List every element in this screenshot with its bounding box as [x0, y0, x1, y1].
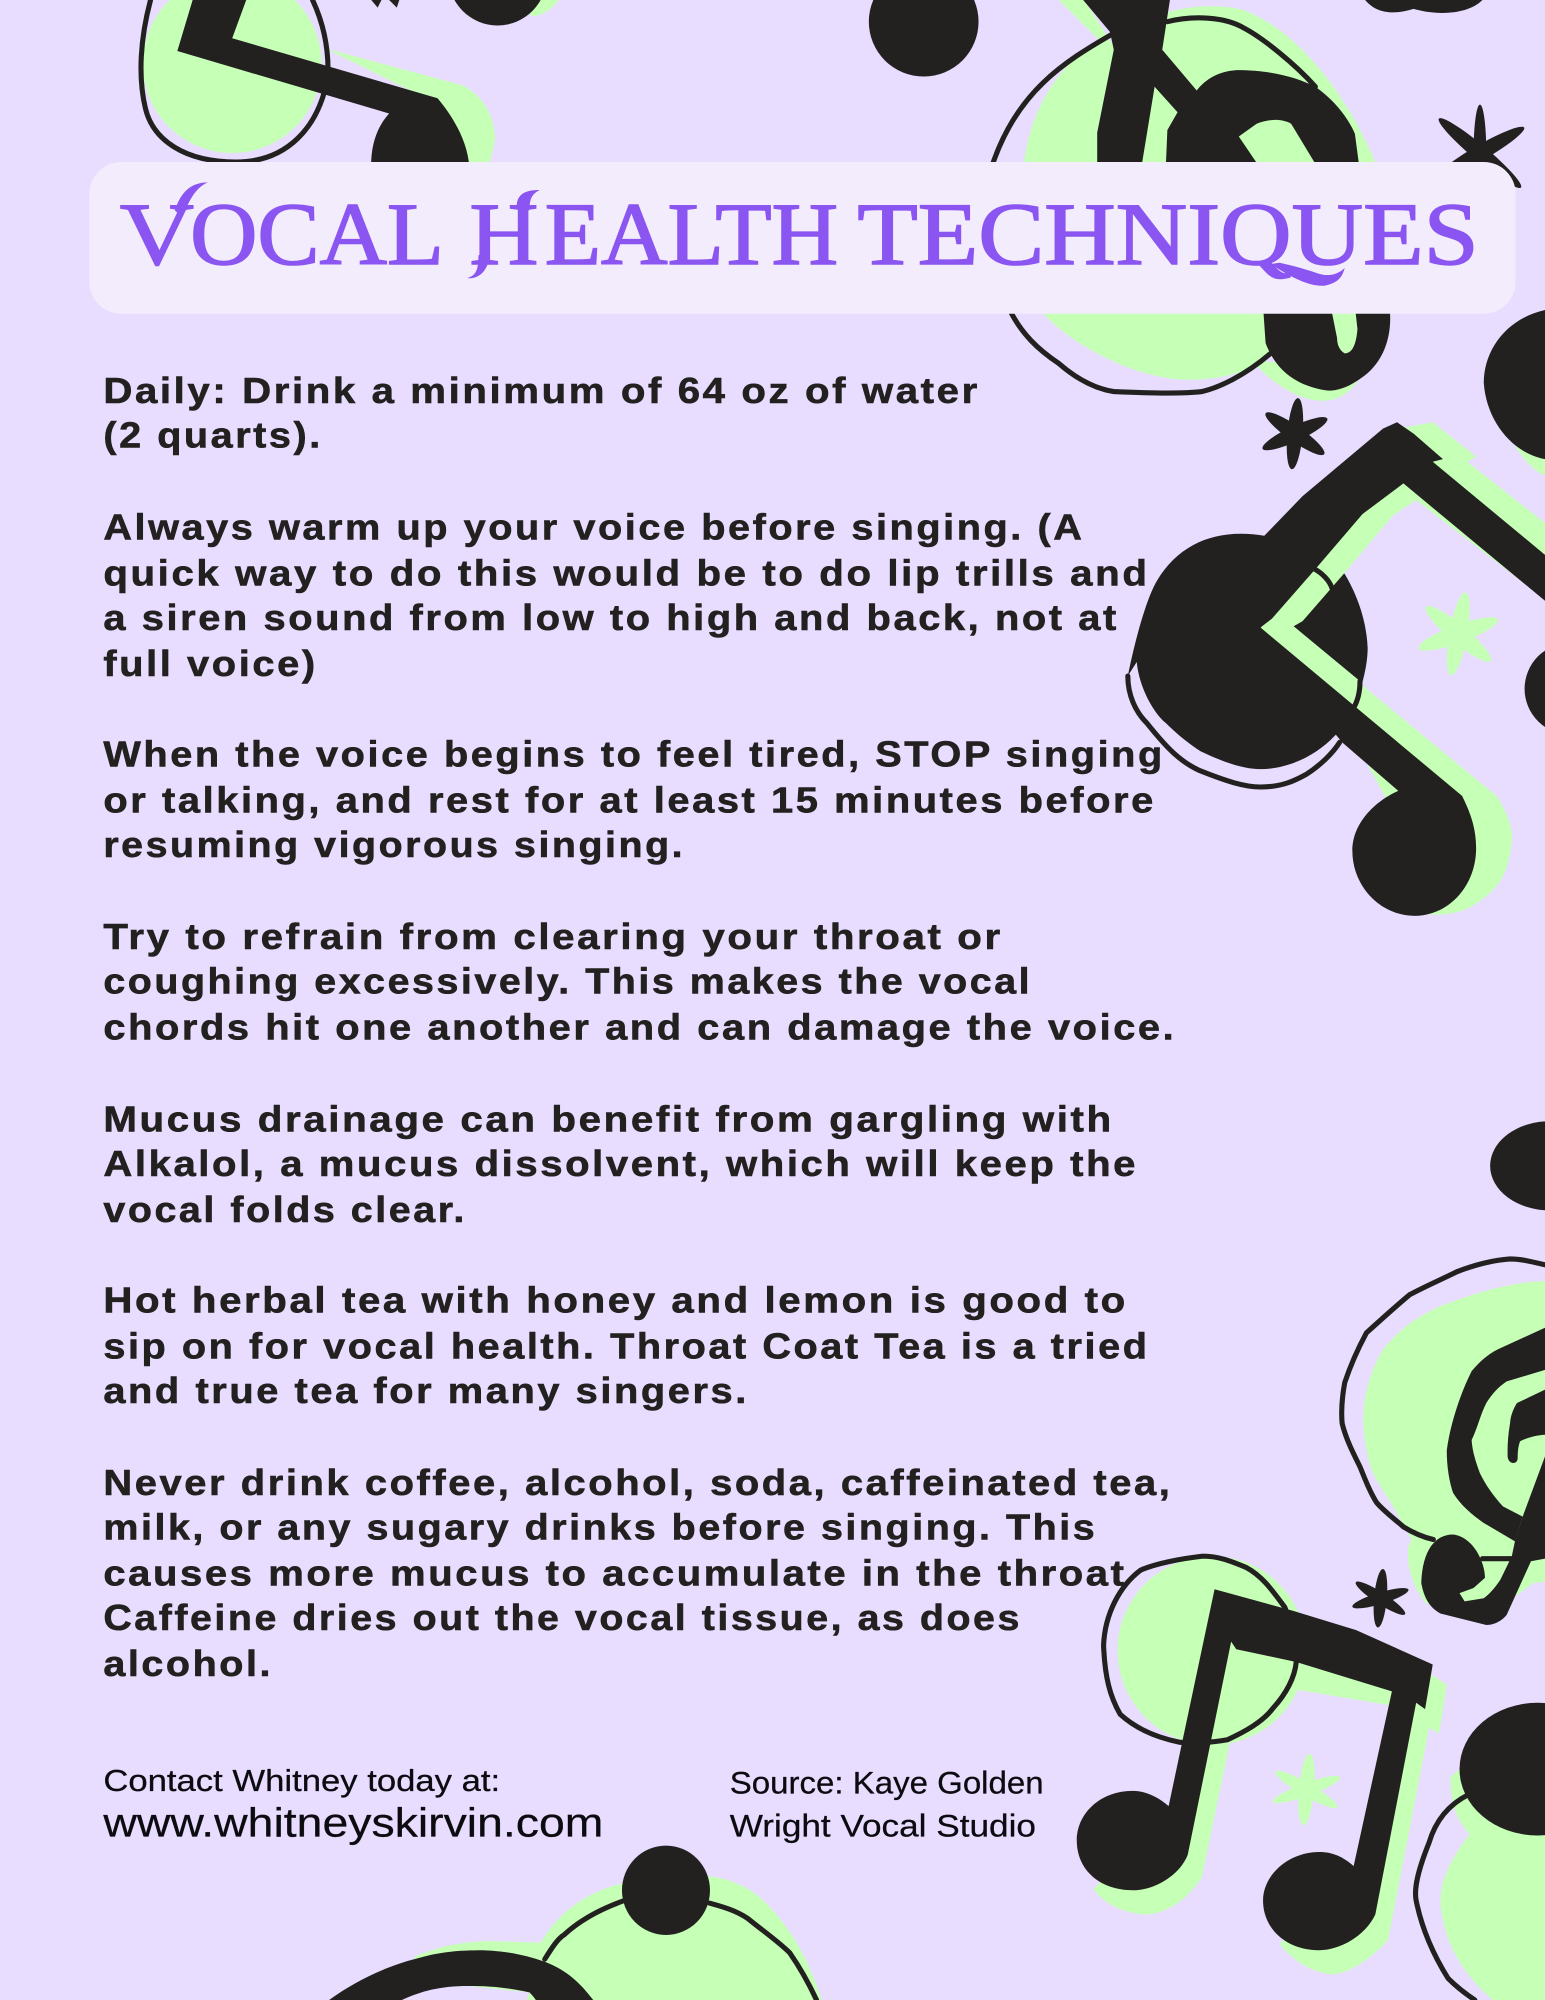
icon: top centre black blob	[869, 0, 979, 77]
icon: top-right treble clef	[990, 0, 1391, 401]
text block: herbal tea: and true tea for many singers.	[103, 1371, 749, 1411]
text block: mucus drainage: Alkalol, a mucus dissolvent, which will keep the	[103, 1144, 1138, 1184]
text block: throat clearing: Try to refrain from clearing your throat or	[103, 917, 1003, 957]
icon: star behind title panel	[1432, 105, 1528, 202]
icon: black star	[1257, 395, 1333, 472]
icon: top-right black blob	[1365, 0, 1482, 13]
text block: throat clearing: chords hit one another and can damage the voice.	[103, 1008, 1176, 1048]
text block: mucus drainage: Mucus drainage can benefit from gargling with	[103, 1099, 1114, 1139]
icon: large tilted music note	[1128, 422, 1545, 916]
text block: warm up: full voice)	[103, 644, 318, 684]
text block: drinks to avoid: Never drink coffee, alcohol, soda, caffeinated tea,	[103, 1463, 1172, 1503]
icon: double music note	[1077, 1556, 1447, 1974]
text block: rest when tired	[103, 735, 1165, 865]
text block: herbal tea: sip on for vocal health. Throat Coat Tea is a tried	[103, 1326, 1150, 1366]
icon: top small blob and star	[371, 0, 559, 26]
text block: daily water: (2 quarts).	[103, 416, 323, 456]
text block: mucus drainage	[103, 1099, 1138, 1230]
icon: right edge blob middle	[1525, 643, 1545, 735]
text block: source: Wright Vocal Studio	[730, 1809, 1036, 1844]
text block: contact: Contact Whitney today at:	[103, 1764, 500, 1798]
text block: rest when tired: When the voice begins to feel tired, STOP singing	[103, 735, 1165, 775]
icon: black star near clef	[1349, 1566, 1412, 1630]
text block: drinks to avoid: alcohol.	[103, 1644, 273, 1684]
icon: top-left music note	[141, 0, 495, 172]
text block: throat clearing: coughing excessively. This makes the vocal	[103, 962, 1032, 1002]
icon: bottom centre music note	[329, 1846, 822, 2000]
text block: drinks to avoid	[103, 1463, 1172, 1684]
text block: mucus drainage: vocal folds clear.	[103, 1190, 467, 1230]
text block: source: Source: Kaye Golden	[730, 1765, 1044, 1800]
text block: drinks to avoid: Caffeine dries out the vocal tissue, as does	[103, 1598, 1022, 1638]
text block: daily water: Daily: Drink a minimum of 64 oz of water	[103, 371, 980, 411]
text block: contact: www.whitneyskirvin.com	[102, 1800, 603, 1846]
title: TECHNIQUES	[857, 185, 1479, 284]
text block: warm up: a siren sound from low to high and back, not at	[103, 598, 1119, 638]
text block: herbal tea: Hot herbal tea with honey and lemon is good to	[103, 1281, 1128, 1320]
icon: green star	[1411, 585, 1506, 682]
panel: title banner	[89, 162, 1516, 314]
text block: contact	[102, 1764, 603, 1846]
text block: daily water	[103, 371, 980, 456]
title: V	[120, 185, 194, 284]
text block: herbal tea	[103, 1281, 1150, 1411]
title: H	[469, 185, 538, 284]
text block: drinks to avoid: milk, or any sugary drinks before singing. This	[103, 1508, 1097, 1548]
title: EALTH	[545, 185, 838, 284]
text block: warm up: quick way to do this would be to do lip trills and	[103, 553, 1150, 593]
text block: rest when tired: or talking, and rest for at least 15 minutes before	[103, 781, 1156, 820]
icon: bottom-right blob and ring	[1415, 1703, 1545, 2000]
icon: right edge black blob	[1484, 310, 1545, 476]
icon: right edge blob lower	[1490, 1121, 1545, 1210]
text block: throat clearing	[103, 917, 1176, 1048]
text block: warm up	[103, 508, 1150, 684]
icon: green star lower	[1268, 1751, 1344, 1828]
title letter swashes	[175, 182, 1345, 286]
text block: warm up: Always warm up your voice before singing. (A	[103, 508, 1084, 548]
title: OCAL	[190, 185, 444, 284]
text block: source	[730, 1765, 1044, 1844]
icon: lower-right treble clef	[1342, 1259, 1545, 1625]
text block: rest when tired: resuming vigorous singing.	[103, 825, 685, 865]
text block: drinks to avoid: causes more mucus to accumulate in the throat	[103, 1553, 1127, 1593]
